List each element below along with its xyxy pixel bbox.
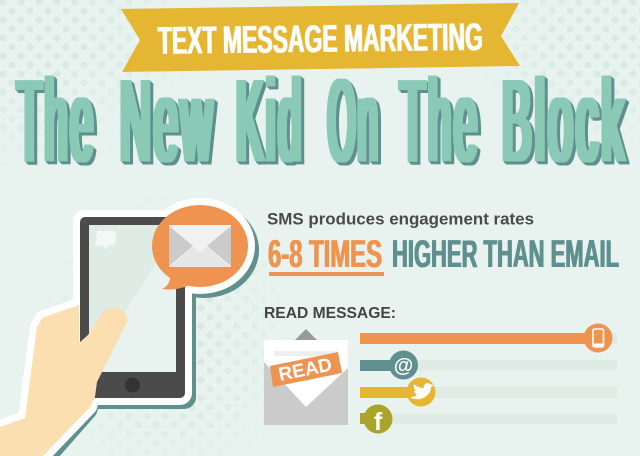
headline: 6-8 times [268,233,384,276]
icon: envelope [169,225,231,267]
headline: 6-8 times: 6-8 TIMES [268,233,382,276]
phone screen [89,225,176,372]
title [17,55,627,186]
white outline [0,205,248,456]
icon: read envelope [264,329,348,425]
bar: twitter [360,378,617,406]
illustration: hand holding phone [0,205,252,456]
title: The [400,55,480,186]
bar chart: read message rates [360,324,617,436]
bar: facebook: f [374,408,383,436]
ribbon banner [121,3,520,72]
shadow of phone, hand and bubble [20,209,252,456]
bar: facebook [360,404,617,436]
icon: read envelope: READ [277,355,334,386]
hand [0,305,127,456]
icon: chat bubbles [94,231,116,250]
title: New [120,55,215,186]
phone body [80,217,185,398]
read message heading: READ MESSAGE: [264,305,396,322]
bar: email: @ [394,355,413,377]
title: Kid [236,55,304,186]
subheading: SMS produces engagement rates [267,210,534,228]
bar: mobile [360,324,617,352]
home button [125,378,140,392]
title: On [328,55,380,186]
title: The [17,55,96,186]
speech bubble [152,205,248,290]
bar: email [360,350,617,380]
